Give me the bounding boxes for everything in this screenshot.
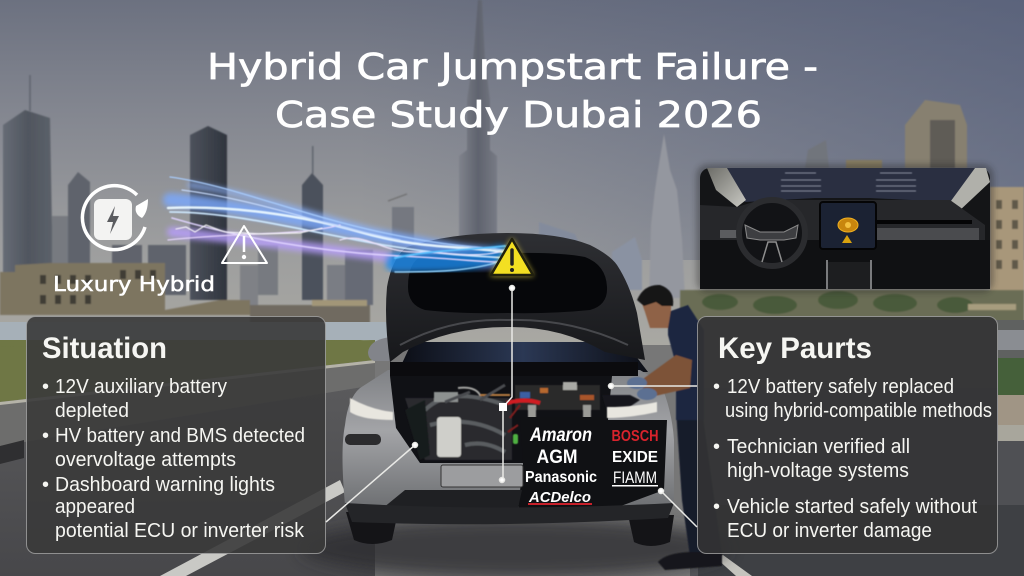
- pillars: [707, 168, 746, 207]
- key parts bullet list: •: [713, 376, 720, 398]
- situation bullet list: depleted: [55, 400, 129, 422]
- steering wheel: [739, 200, 805, 266]
- battery brand logos: [525, 425, 658, 506]
- shoe: [658, 552, 722, 570]
- situation bullet list: •: [42, 376, 49, 398]
- BOSCH: BOSCH: [612, 428, 658, 445]
- car ground shadow: [300, 518, 730, 576]
- situation bullet list: appeared: [55, 496, 135, 518]
- icon: yellow warning triangle: [490, 238, 534, 276]
- situation bullet list: 12V auxiliary battery: [55, 376, 227, 398]
- hood opening: [408, 253, 607, 313]
- situation bullet list: [42, 376, 305, 542]
- licence plate: [441, 465, 523, 487]
- palms and trees: [680, 290, 1024, 322]
- title: [207, 47, 818, 136]
- heading: Situation: Situation: [42, 332, 167, 365]
- hood: [386, 233, 645, 362]
- arm: [636, 355, 692, 396]
- engine parts: [405, 382, 640, 460]
- downtown skyscraper: [649, 134, 685, 298]
- front bumper: [345, 503, 674, 524]
- car with raised hood: [342, 233, 674, 546]
- icon: hybrid battery circle: [82, 186, 148, 250]
- legs: [676, 410, 722, 556]
- key parts bullet list: Vehicle started safely without: [727, 496, 977, 518]
- key parts bullet list: •: [713, 496, 720, 518]
- key parts bullet list: [713, 376, 992, 542]
- Burj tower: [459, 0, 497, 240]
- situation bullet list: Dashboard warning lights: [55, 474, 275, 496]
- title: Hybrid Car Jumpstart Failure -: [207, 47, 818, 88]
- key parts bullet list: using hybrid-compatible methods: [725, 400, 992, 422]
- left mirror: [368, 337, 392, 361]
- key parts bullet list: ECU or inverter damage: [727, 520, 932, 542]
- gloves: [627, 377, 647, 389]
- heading: Key Paurts: Key Paurts: [718, 332, 872, 365]
- key parts bullet list: •: [713, 436, 720, 458]
- centre screen with warning: [820, 202, 876, 249]
- title: Case Study Dubai 2026: [275, 95, 762, 136]
- AGM: AGM: [536, 447, 578, 468]
- situation bullet list: potential ECU or inverter risk: [55, 520, 305, 542]
- ACDelco: ACDelco: [528, 489, 591, 506]
- dash: [700, 200, 985, 240]
- key parts bullet list: Technician verified all: [727, 436, 910, 458]
- Panasonic: Panasonic: [525, 469, 597, 486]
- situation bullet list: •: [42, 425, 49, 447]
- shirt: [668, 305, 704, 420]
- car body: [342, 370, 674, 505]
- Amaron: Amaron: [529, 425, 592, 446]
- FIAMM: FIAMM: [613, 468, 657, 487]
- head: [640, 287, 671, 328]
- logo panel: [518, 417, 667, 510]
- engine bay: [390, 376, 612, 463]
- technician: [627, 285, 722, 570]
- callout lines: [326, 286, 697, 527]
- key parts bullet list: high-voltage systems: [727, 460, 909, 482]
- windshield view: [727, 168, 975, 202]
- grille: [383, 490, 522, 508]
- panel: Situation: [26, 316, 326, 554]
- key parts bullet list: 12V battery safely replaced: [727, 376, 954, 398]
- EXIDE: EXIDE: [612, 449, 658, 466]
- icon: small white warning triangle: [222, 226, 267, 263]
- energy light streaks: [168, 177, 505, 272]
- windshield: [398, 342, 648, 372]
- situation bullet list: HV battery and BMS detected: [55, 425, 305, 447]
- tyres: [346, 512, 674, 546]
- headlights: [350, 398, 657, 420]
- panel: Key Paurts: [698, 316, 998, 554]
- low-rise buildings: [0, 263, 250, 315]
- dashboard warning inset: [696, 164, 994, 293]
- situation bullet list: •: [42, 474, 49, 496]
- label: Luxury Hybrid: Luxury Hybrid: [53, 272, 215, 296]
- situation bullet list: overvoltage attempts: [55, 449, 236, 471]
